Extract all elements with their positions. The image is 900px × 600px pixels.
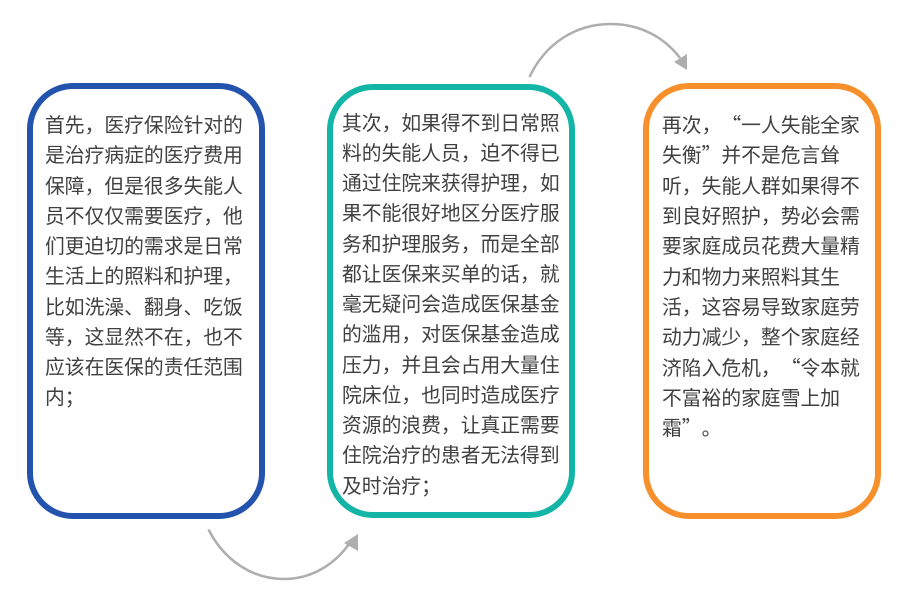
panel: second reason bbox=[327, 84, 575, 518]
panel: first reason bbox=[27, 83, 265, 519]
panel: third reason bbox=[643, 83, 881, 519]
text: third reason: 再次，“一人失能全家 失衡”并不是危言耸 听，失能人群如果得不 到良好照护，势必会需 要家庭成员花费大量精 力和物力来照料其生 活，这容易导致家庭劳 动力减少，整个家庭经 济陷入危机，“令本就 不富裕的家庭雪上加 霜”。 bbox=[662, 109, 860, 441]
text: first reason: 首先，医疗保险针对的 是治疗病症的医疗费用 保障，但是很多失能人 员不仅仅需要医疗，他 们更迫切的需求是日常 生活上的照料和护理， 比如洗澡、翻身、吃饭 等，这显然不在，也不 应该在医保的责任范围 内； bbox=[45, 109, 243, 410]
text: second reason: 其次，如果得不到日常照 料的失能人员，迫不得已 通过住院来获得护理，如 果不能很好地区分医疗服 务和护理服务，而是全部 都让医保来买单的话，就 毫无疑问会造成医保基金 的滥用，对医保基金造成 压力，并且会占用大量住 院床位，也同时造成医疗 资源的浪费，让真正需要 住院治疗的患者无法得到 及时治疗； bbox=[342, 106, 560, 498]
